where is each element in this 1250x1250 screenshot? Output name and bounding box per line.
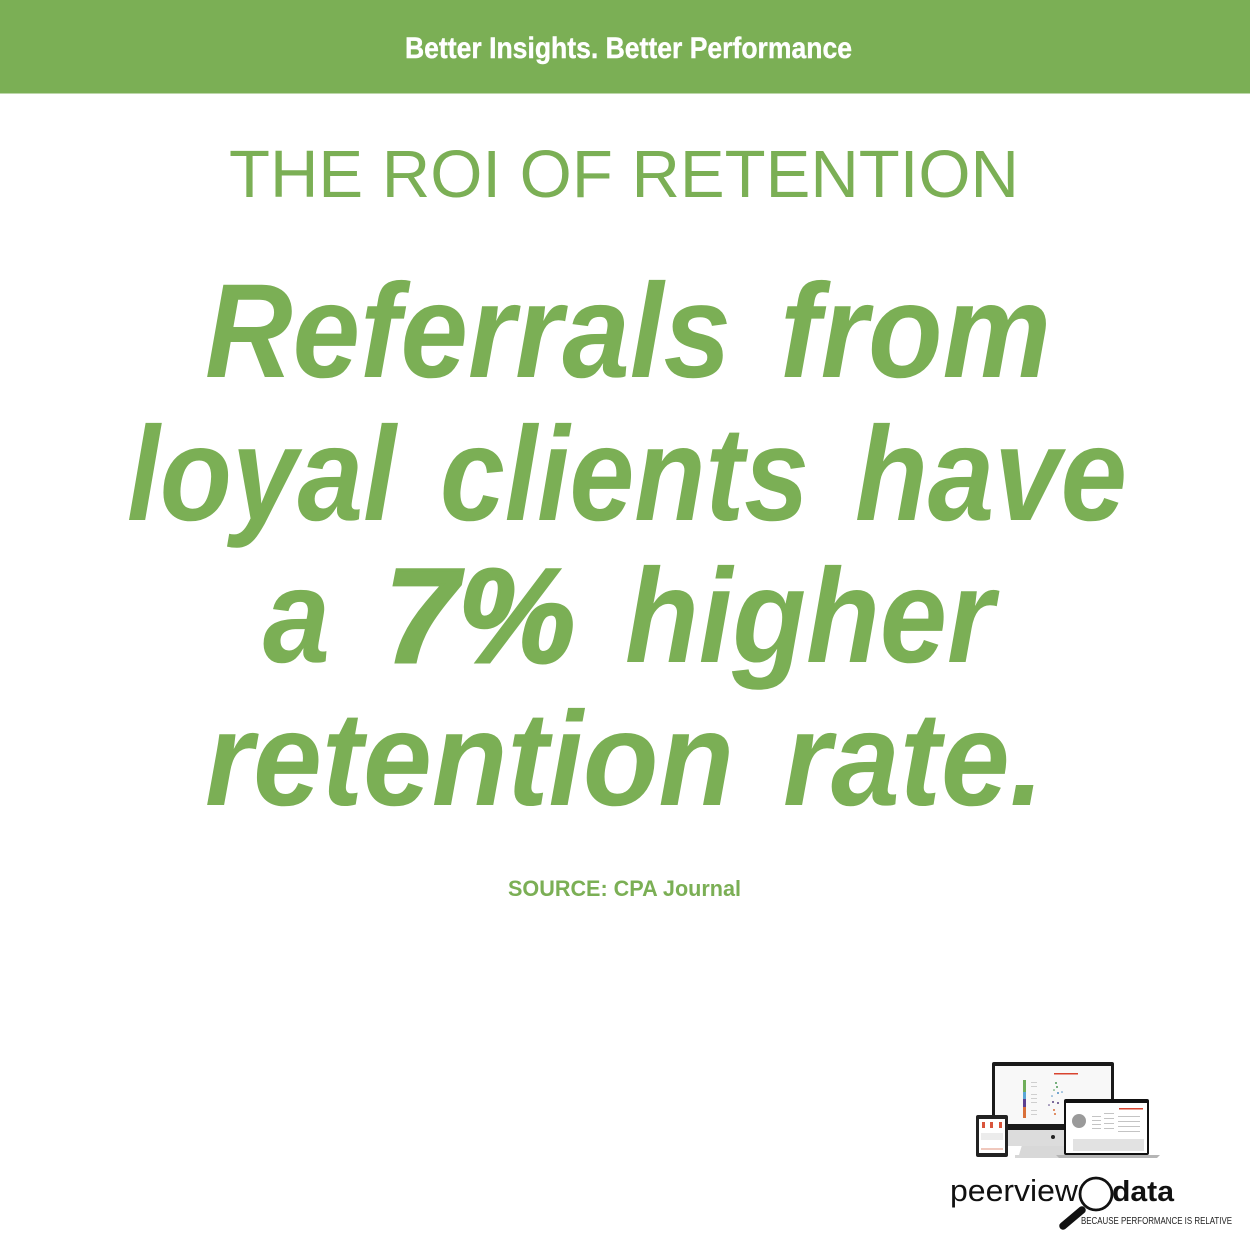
main statement: higher	[625, 542, 1000, 691]
main statement: clients	[440, 400, 809, 549]
main statement: 7%	[385, 542, 575, 691]
header banner: Better Insights. Better Performance	[405, 32, 852, 65]
main statement: loyal	[127, 400, 398, 549]
icon: magnifying glass	[1063, 1178, 1112, 1226]
icon: tablet	[976, 1115, 1008, 1157]
main statement: Referrals	[205, 257, 731, 406]
device mockups	[976, 1062, 1160, 1158]
logo: peerview data	[950, 1173, 1232, 1227]
main statement: from	[780, 257, 1051, 406]
logo: peerview data: data	[1112, 1176, 1175, 1208]
main statement: have	[855, 400, 1127, 549]
icon: laptop	[1056, 1099, 1160, 1158]
header banner	[0, 0, 1250, 94]
main statement	[127, 257, 1127, 834]
main statement: rate.	[783, 685, 1044, 834]
main statement: a	[263, 542, 330, 691]
source: SOURCE: CPA Journal	[508, 876, 741, 901]
title: THE ROI OF RETENTION	[229, 137, 1019, 212]
logo: peerview data: peerview	[950, 1173, 1079, 1208]
icon: desktop monitor	[992, 1062, 1114, 1158]
main statement: retention	[205, 685, 734, 834]
